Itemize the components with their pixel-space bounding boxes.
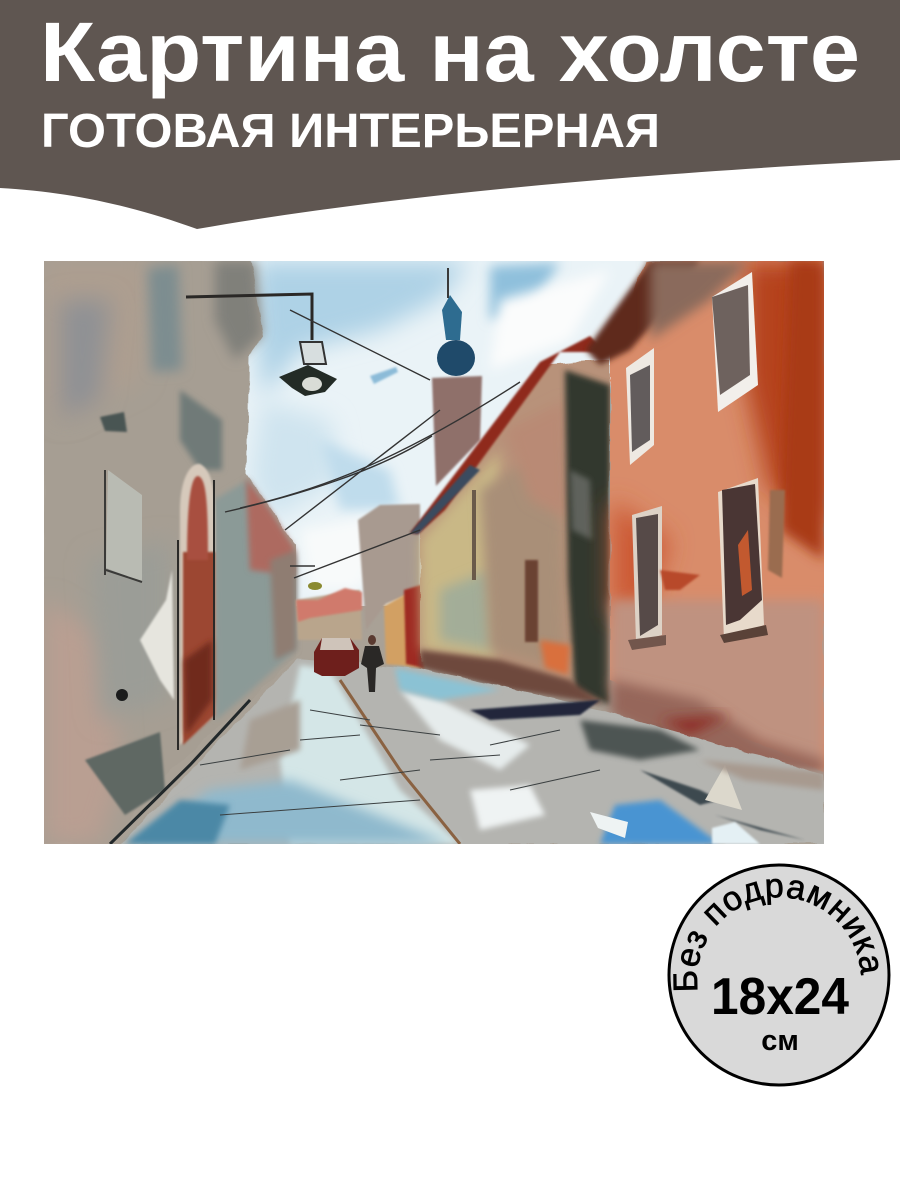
left building	[44, 261, 296, 844]
badge unit: см	[761, 1025, 799, 1057]
small lamp	[308, 582, 322, 590]
pedestrian	[361, 635, 384, 692]
badge curved text: Без подрамника	[673, 878, 878, 990]
title: Картина на холсте	[40, 5, 860, 99]
badge	[668, 864, 890, 1086]
sky	[240, 261, 660, 606]
banner	[0, 0, 900, 229]
painting: watercolor street	[44, 261, 824, 844]
middle building	[410, 336, 610, 705]
overhead wires	[225, 310, 520, 578]
street lamp	[186, 294, 337, 396]
church tower	[432, 268, 482, 486]
right building	[586, 261, 824, 775]
red car	[314, 638, 359, 676]
badge size: 18x24	[711, 968, 849, 1026]
distant buildings	[296, 504, 424, 668]
subtitle: ГОТОВАЯ ИНТЕРЬЕРНАЯ	[41, 105, 660, 158]
street	[110, 658, 824, 844]
arched red door	[180, 464, 215, 745]
